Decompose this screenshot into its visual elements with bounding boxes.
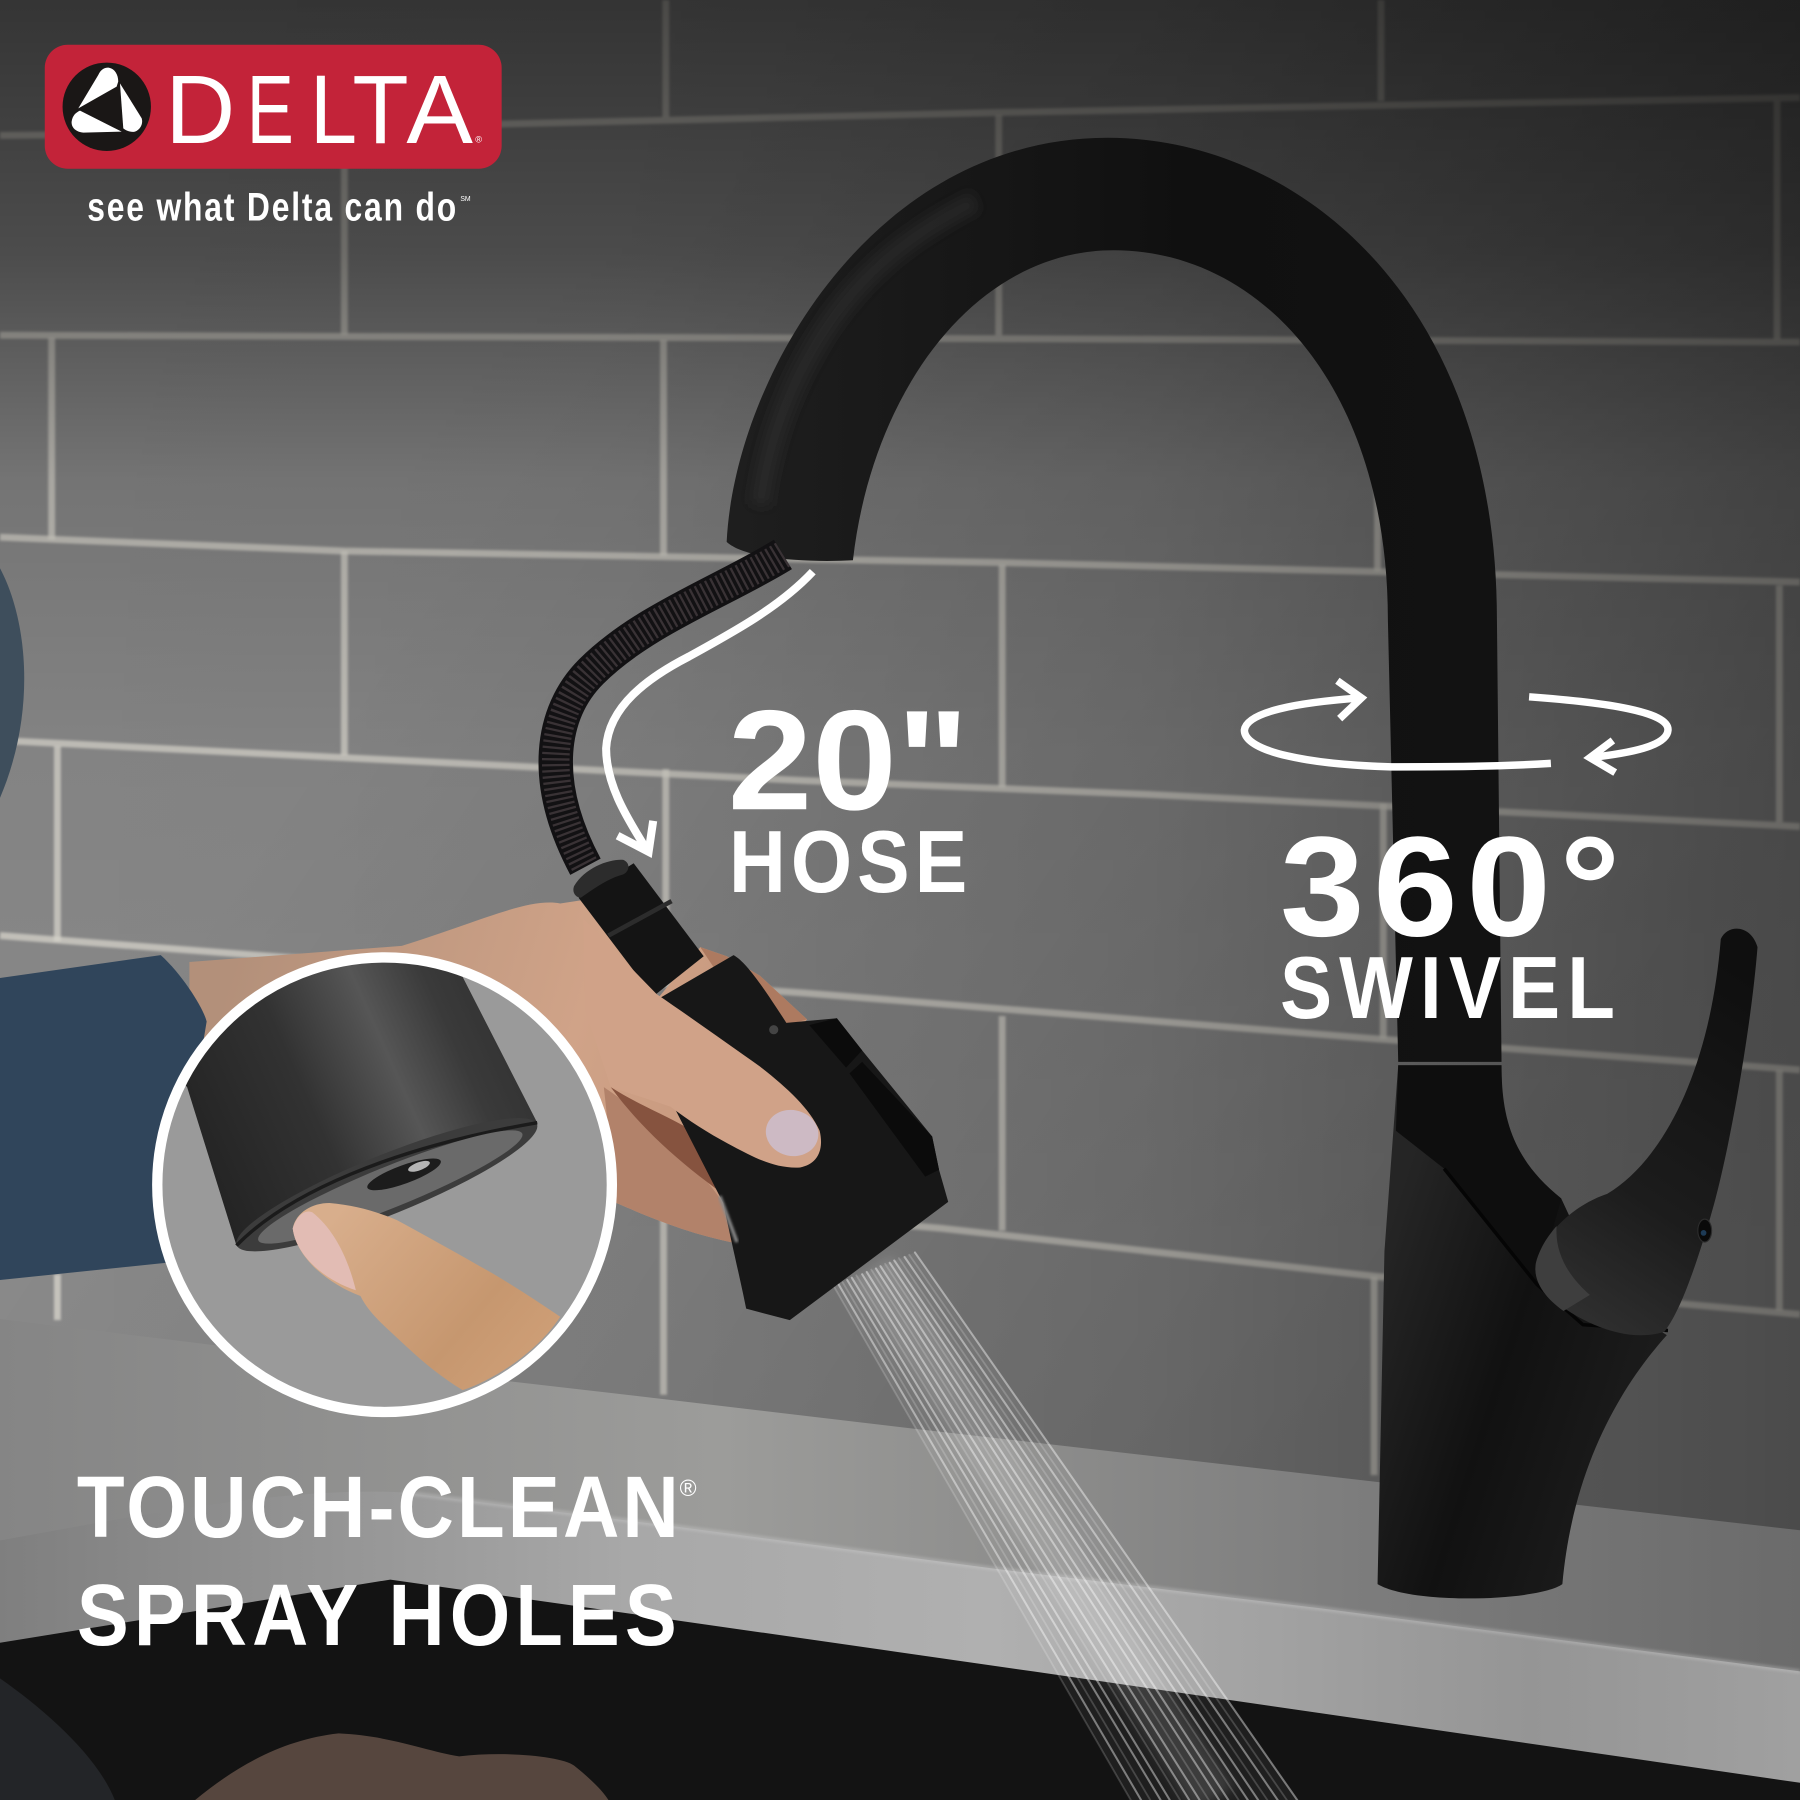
label: touch-clean spray holes: TOUCH-CLEAN — [77, 1459, 682, 1556]
thumb — [583, 918, 823, 1168]
sink basin with hands — [0, 1580, 1800, 1800]
label: 20 inch hose: HOSE — [729, 812, 972, 911]
label: touch-clean spray holes — [77, 1459, 697, 1664]
sleeve — [0, 955, 207, 1280]
tagline: see what Delta can do — [87, 184, 458, 229]
shoulder at left edge — [0, 568, 24, 798]
label: touch-clean spray holes: ® — [680, 1475, 697, 1501]
label: touch-clean spray holes: SPRAY HOLES — [77, 1567, 682, 1664]
arrow: hose length — [606, 572, 813, 852]
label: 20 inch hose: 20" — [728, 681, 969, 840]
logo wordmark: E — [247, 55, 294, 164]
logo wordmark: T — [352, 55, 409, 164]
logo badge — [45, 45, 502, 169]
logo wordmark: L — [310, 55, 357, 164]
icon: spray head cylinder — [186, 962, 538, 1244]
faucet body — [1378, 1065, 1668, 1598]
hand behind spray head — [189, 900, 807, 1320]
countertop — [0, 1319, 1800, 1800]
registered mark: ® — [475, 134, 482, 144]
tagline: SM — [460, 196, 471, 203]
hose connector — [573, 860, 704, 996]
finger — [293, 1203, 560, 1390]
logo wordmark: A — [406, 55, 473, 164]
logo: Delta — [45, 45, 502, 169]
arrow: swivel rotation — [1244, 681, 1668, 773]
spray head body — [657, 955, 948, 1320]
icon: Delta triangle mark — [63, 63, 151, 151]
spray head — [573, 860, 948, 1320]
hose — [556, 554, 783, 867]
callout: touch-clean spray holes magnifier — [152, 952, 617, 1418]
faucet handle — [1535, 929, 1758, 1335]
logo wordmark: D — [165, 55, 235, 164]
label: 360 degree swivel — [1280, 808, 1629, 1037]
spray buttons — [809, 1018, 939, 1177]
water spray — [833, 1252, 1297, 1800]
logo wordmark — [165, 55, 473, 164]
faucet spout and stem — [727, 138, 1502, 1062]
label: 360 degree swivel: 360° — [1280, 808, 1629, 967]
label: 360 degree swivel: SWIVEL — [1280, 938, 1622, 1037]
spray head rim and holes — [235, 1121, 538, 1252]
label: 20 inch hose — [728, 681, 972, 911]
